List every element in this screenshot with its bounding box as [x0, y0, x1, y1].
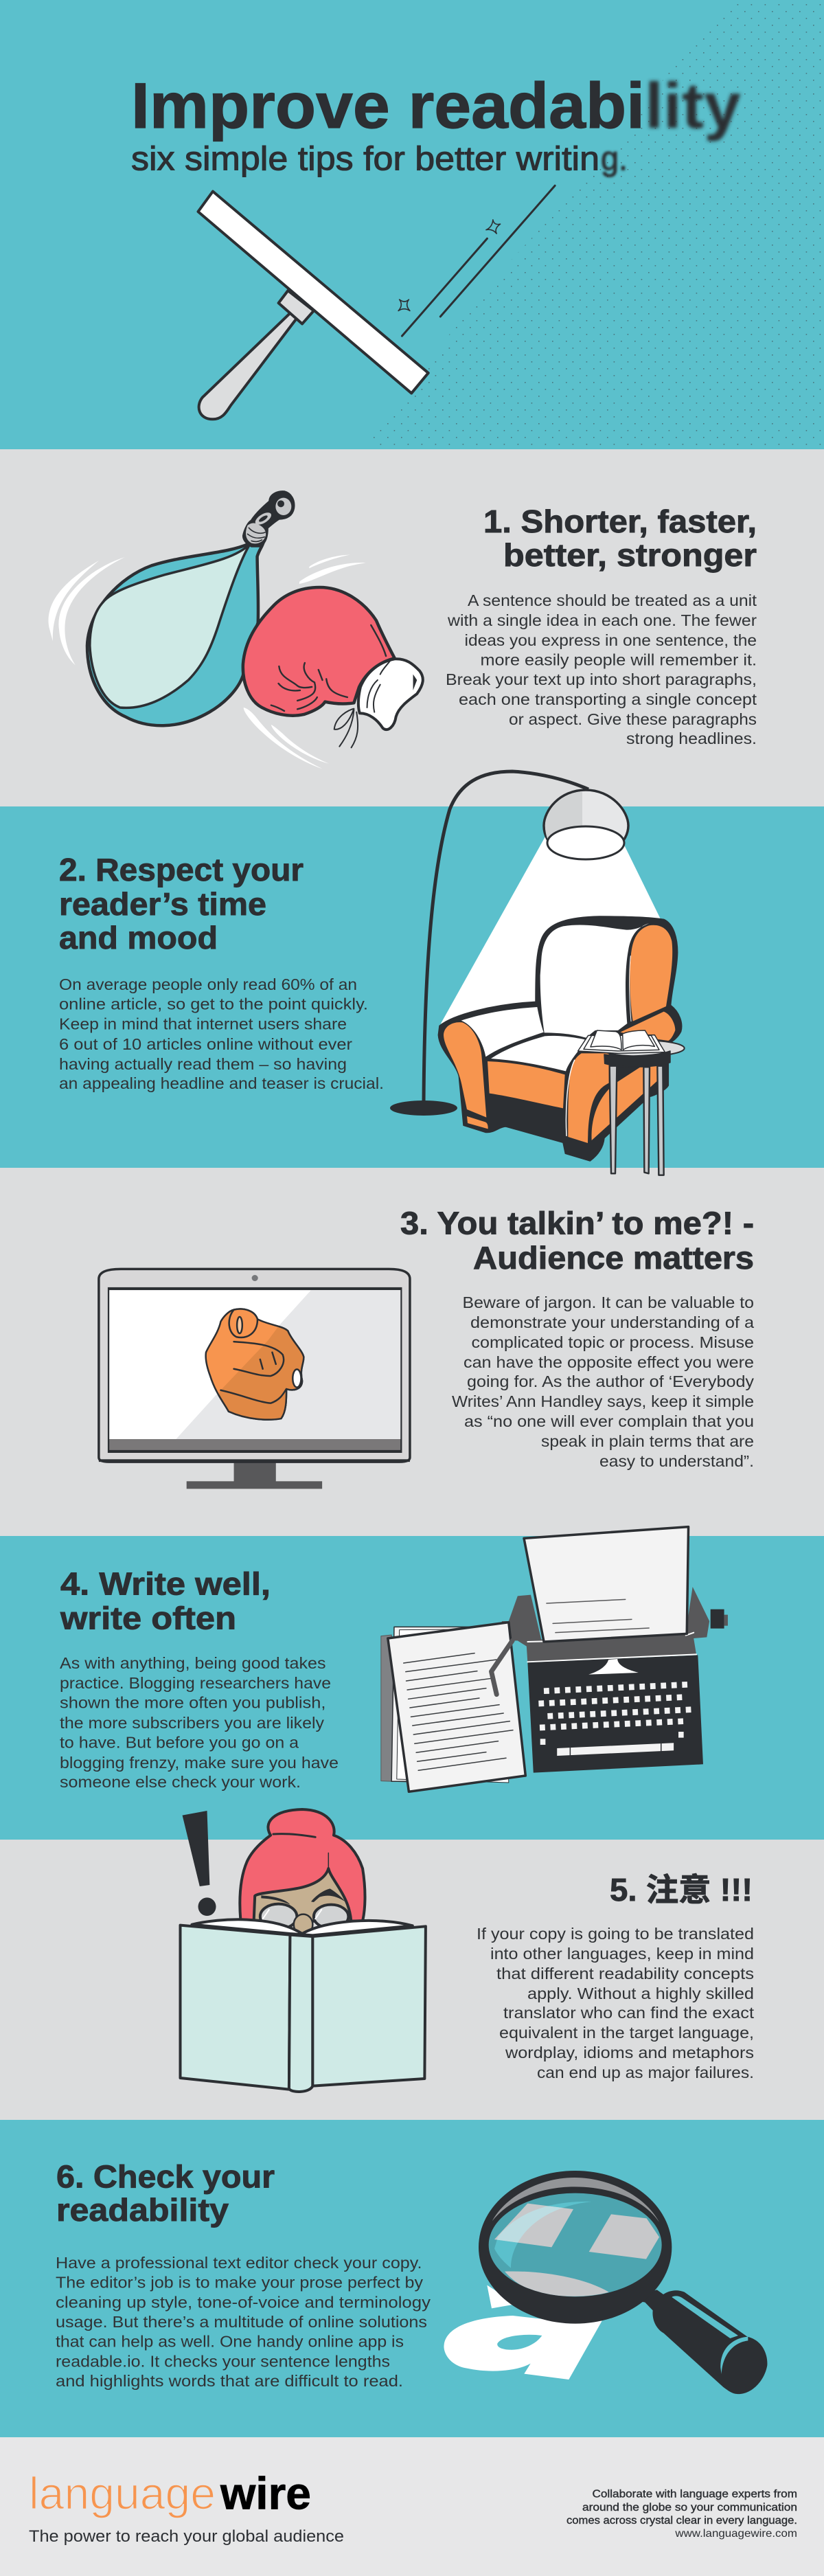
panel: footer: [0, 2437, 824, 2576]
body text: the more subscribers you are likely: [60, 1714, 325, 1732]
call to action text: around the globe so your communication: [582, 2502, 797, 2513]
icon: magnifying glass over letter a: [444, 2171, 767, 2394]
icon: squeegee: [198, 185, 555, 419]
icon: pointing hand: [206, 1309, 304, 1420]
logo: languagewire: wire: [220, 2468, 311, 2519]
halftone dot pattern: [364, 0, 824, 449]
icon: armchair with book and side table: [438, 916, 685, 1175]
call to action text: www.languagewire.com: [674, 2528, 797, 2540]
body text: 6 out of 10 articles online without ever: [59, 1035, 352, 1053]
body text: speak in plain terms that are: [541, 1432, 754, 1450]
body text: can have the opposite effect you were: [464, 1353, 754, 1371]
body text: Have a professional text editor check your copy.: [56, 2254, 422, 2272]
panel: tip 2: [0, 771, 824, 1175]
body text: readable.io. It checks your sentence lengths: [56, 2352, 390, 2370]
body text: can end up as major failures.: [537, 2064, 754, 2081]
heading: 6. Check your: [56, 2159, 275, 2195]
heading: and mood: [59, 920, 218, 956]
body text: [60, 1654, 339, 1791]
body text: or aspect. Give these paragraphs: [509, 710, 757, 728]
panel: tip 5: [0, 1809, 824, 2120]
heading: [483, 504, 757, 573]
call to action text: [566, 2488, 797, 2540]
icon: computer monitor with pointing hand: [99, 1269, 410, 1489]
body text: that different readability concepts: [496, 1965, 754, 1982]
body text: complicated topic or process. Misuse: [471, 1333, 754, 1351]
heading: [60, 1566, 271, 1636]
body text: wordplay, idioms and metaphors: [505, 2044, 754, 2061]
heading: [56, 2159, 275, 2228]
body text: Writes’ Ann Handley says, keep it simple: [452, 1392, 754, 1410]
body text: to have. But before you go on a: [60, 1734, 299, 1752]
body text: more easily people will remember it.: [481, 651, 757, 669]
title: lity: [645, 69, 741, 142]
body text: each one transporting a single concept: [459, 690, 757, 708]
body text: demonstrate your understanding of a: [470, 1313, 754, 1331]
body text: ideas you express in one sentence, the: [464, 631, 757, 649]
heading: better, stronger: [503, 537, 757, 573]
title: Improve readabi: [131, 69, 645, 142]
subtitle: six simple tips for better writin: [131, 140, 599, 177]
body text: easy to understand”.: [599, 1452, 754, 1470]
body text: [477, 1925, 755, 2081]
body text: Break your text up into short paragraphs,: [446, 670, 757, 688]
body text: usage. But there’s a multitude of online solutions: [56, 2313, 427, 2331]
heading: 5. 注意 !!!: [610, 1872, 753, 1908]
body text: On average people only read 60% of an: [59, 975, 357, 993]
body text: practice. Blogging researchers have: [60, 1674, 331, 1692]
icon: floor lamp with light cone: [390, 771, 661, 1116]
body text: strong headlines.: [626, 730, 757, 747]
body text: Beware of jargon. It can be valuable to: [463, 1293, 754, 1311]
body text: Keep in mind that internet users share: [59, 1015, 347, 1033]
body text: apply. Without a highly skilled: [527, 1985, 754, 2002]
panel: tip 1: [0, 449, 824, 806]
icon: typewriter and paper stack: [381, 1527, 728, 1792]
subtitle: g.: [601, 140, 628, 177]
body text: with a single idea in each one. The fewer: [447, 611, 757, 629]
heading: reader’s time: [59, 886, 266, 922]
call to action text: comes across crystal clear in every language.: [566, 2515, 797, 2527]
body text: translator who can find the exact: [503, 2004, 755, 2022]
body text: shown the more often you publish,: [60, 1694, 325, 1712]
body text: The editor’s job is to make your prose perfect by: [56, 2274, 424, 2292]
panel: tip 4: [0, 1527, 824, 1840]
body text: equivalent in the target language,: [499, 2024, 754, 2042]
body text: an appealing headline and teaser is crucial.: [59, 1074, 384, 1092]
panel: header: [132, 4, 821, 445]
icon: person reading book with exclamation mark: [180, 1809, 426, 2092]
body text: [56, 2254, 431, 2390]
body text: someone else check your work.: [60, 1773, 301, 1791]
body text: [59, 975, 384, 1092]
tagline: The power to reach your global audience: [29, 2527, 344, 2546]
logo: languagewire: [29, 2468, 311, 2519]
call to action text: Collaborate with language experts from: [592, 2488, 797, 2500]
heading: 1. Shorter, faster,: [483, 504, 757, 539]
body text: If your copy is going to be translated: [477, 1925, 754, 1943]
heading: [400, 1205, 754, 1276]
body text: and highlights words that are difficult to read.: [56, 2372, 403, 2390]
body text: online article, so get to the point quickly.: [59, 995, 368, 1013]
body text: cleaning up style, tone-of-voice and terminology: [56, 2293, 431, 2311]
heading: 3. You talkin’ to me?! -: [400, 1205, 754, 1241]
body text: having actually read them – so having: [59, 1055, 347, 1073]
heading: 2. Respect your: [59, 852, 304, 888]
body text: as “no one will ever complain that you: [464, 1412, 754, 1430]
body text: [452, 1293, 755, 1470]
heading: [59, 852, 304, 956]
body text: blogging frenzy, make sure you have: [60, 1754, 339, 1772]
body text: into other languages, keep in mind: [490, 1945, 754, 1963]
heading: readability: [56, 2192, 229, 2228]
heading: write often: [60, 1601, 236, 1636]
body text: As with anything, being good takes: [60, 1654, 326, 1672]
body text: [446, 591, 757, 747]
body text: A sentence should be treated as a unit: [468, 591, 757, 609]
icon: punching bag and boxing glove: [48, 492, 423, 769]
heading: Audience matters: [473, 1240, 754, 1276]
heading: 4. Write well,: [60, 1566, 271, 1602]
body text: going for. As the author of ‘Everybody: [467, 1372, 755, 1390]
logo: languagewire: language: [29, 2468, 216, 2519]
panel: tip 6: [56, 2164, 768, 2395]
panel: tip 3: [98, 1210, 754, 1489]
body text: that can help as well. One handy online app is: [56, 2333, 404, 2351]
